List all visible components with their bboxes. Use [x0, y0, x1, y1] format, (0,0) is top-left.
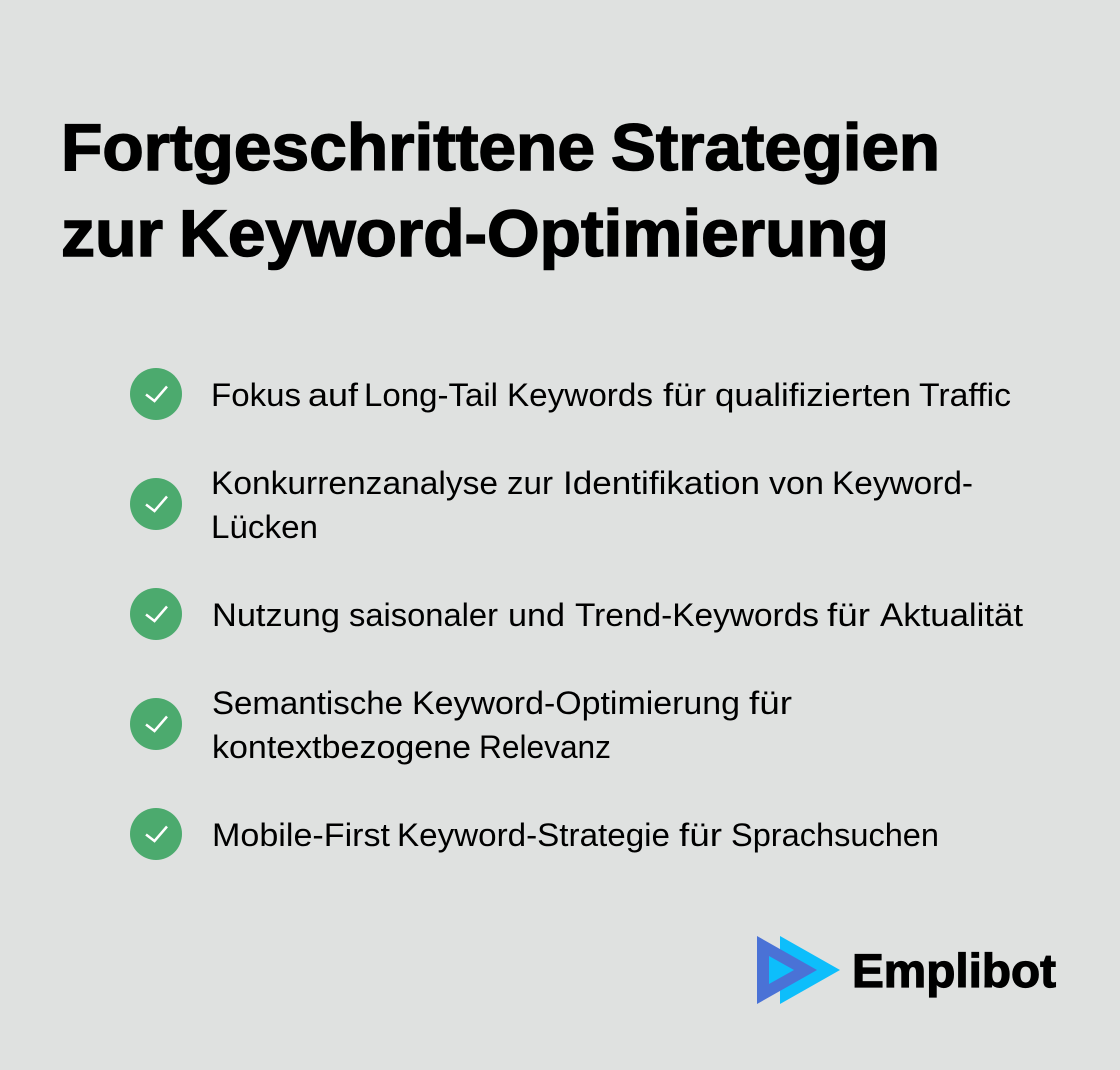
list item 5: für — [679, 817, 722, 853]
list item 2: Konkurrenzanalyse — [211, 465, 498, 501]
list item 3: für — [827, 597, 870, 633]
logo: Emplibot: Emplibot — [852, 944, 1056, 997]
list item 3: Aktualität — [880, 597, 1023, 633]
list item 4: Keyword-Optimierung — [412, 685, 740, 721]
list item 1 — [130, 368, 1011, 420]
list item 3: Nutzung — [212, 597, 340, 633]
list item 4: Relevanz — [479, 729, 611, 765]
title: Fortgeschrittene — [61, 110, 595, 184]
list item 1: auf — [308, 377, 358, 413]
title: zur — [61, 196, 163, 270]
checklist — [130, 368, 1023, 860]
title: Strategien — [611, 110, 940, 184]
title — [61, 110, 940, 270]
list item 5: Keyword-Strategie — [397, 817, 670, 853]
list item 2: zur — [507, 465, 553, 501]
list item 5: Sprachsuchen — [731, 817, 939, 853]
list item 3 — [130, 588, 1023, 640]
list item 4: Semantische — [212, 685, 403, 721]
list item 4: für — [749, 685, 792, 721]
list item 1: für — [663, 377, 706, 413]
list item 1: qualifizierten — [715, 377, 911, 413]
list item 2 — [130, 465, 973, 545]
list item 3: und — [508, 597, 565, 633]
title: Keyword-Optimierung — [179, 196, 889, 270]
list item 3: Trend-Keywords — [575, 597, 819, 633]
list item 2: Lücken — [211, 509, 318, 545]
list item 4: kontextbezogene — [212, 729, 471, 765]
list item 5 — [130, 808, 939, 860]
list item 1: Fokus — [211, 377, 301, 413]
list item 1: Long-Tail — [364, 377, 498, 413]
list item 2: Identifikation — [563, 465, 760, 501]
list item 2: Keyword- — [832, 465, 973, 501]
list item 2: von — [769, 465, 824, 501]
logo: Emplibot — [757, 936, 1056, 1004]
list item 1: Keywords — [507, 377, 653, 413]
list item 5: Mobile-First — [212, 817, 390, 853]
list item 4 — [130, 685, 792, 765]
list item 1: Traffic — [919, 377, 1011, 413]
list item 3: saisonaler — [349, 597, 498, 633]
